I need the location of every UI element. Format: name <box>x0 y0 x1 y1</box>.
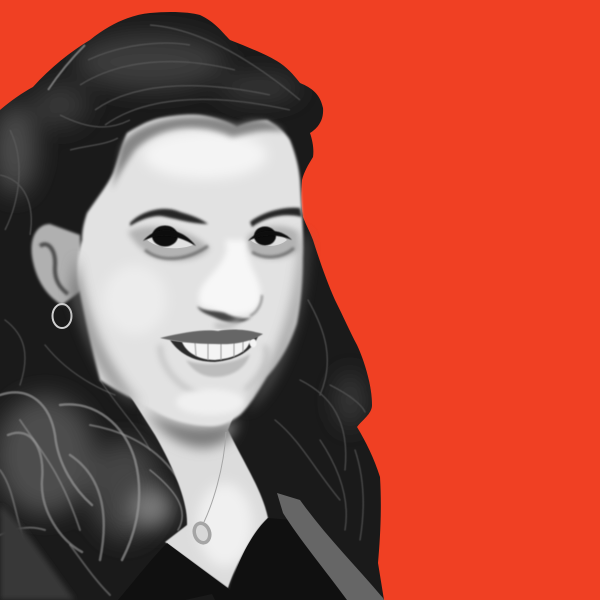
right eye <box>246 226 298 259</box>
earring <box>52 304 72 328</box>
chin highlight <box>176 389 244 415</box>
forehead highlight <box>143 131 267 179</box>
ear <box>32 224 82 305</box>
cheek highlight <box>103 265 167 335</box>
upper lip <box>160 330 263 344</box>
face shading right <box>245 230 308 412</box>
lower lip <box>186 354 250 377</box>
face shading left <box>70 255 140 405</box>
hair <box>0 12 384 600</box>
jacket lapel right <box>277 493 384 600</box>
forehead shadow near hairline <box>112 116 285 190</box>
teeth <box>182 338 256 360</box>
left eye bag <box>145 246 208 259</box>
right eyebrow <box>250 208 302 227</box>
neck and chest <box>120 380 268 588</box>
right eye bag <box>252 248 294 257</box>
crown strands <box>0 25 300 235</box>
neck shadow <box>145 410 238 448</box>
left eye socket shade <box>128 226 210 261</box>
right wave strands <box>275 300 365 540</box>
portrait illustration <box>0 12 384 600</box>
mouth <box>160 330 263 377</box>
nose <box>197 240 262 326</box>
face <box>70 115 308 426</box>
right eye socket shade <box>246 226 298 259</box>
black top <box>118 518 350 600</box>
left eye <box>128 226 210 261</box>
cheek crease <box>160 345 205 398</box>
hair tone patches <box>0 25 365 595</box>
mouth interior <box>170 336 258 362</box>
necklace with pendant <box>192 432 226 545</box>
left eyebrow <box>130 209 208 226</box>
nose underside <box>197 306 252 323</box>
jacket left <box>0 505 75 600</box>
chest light <box>197 483 253 567</box>
tooth separators <box>195 340 243 360</box>
lower left wave strands <box>0 320 183 595</box>
hair light curls <box>130 488 174 528</box>
